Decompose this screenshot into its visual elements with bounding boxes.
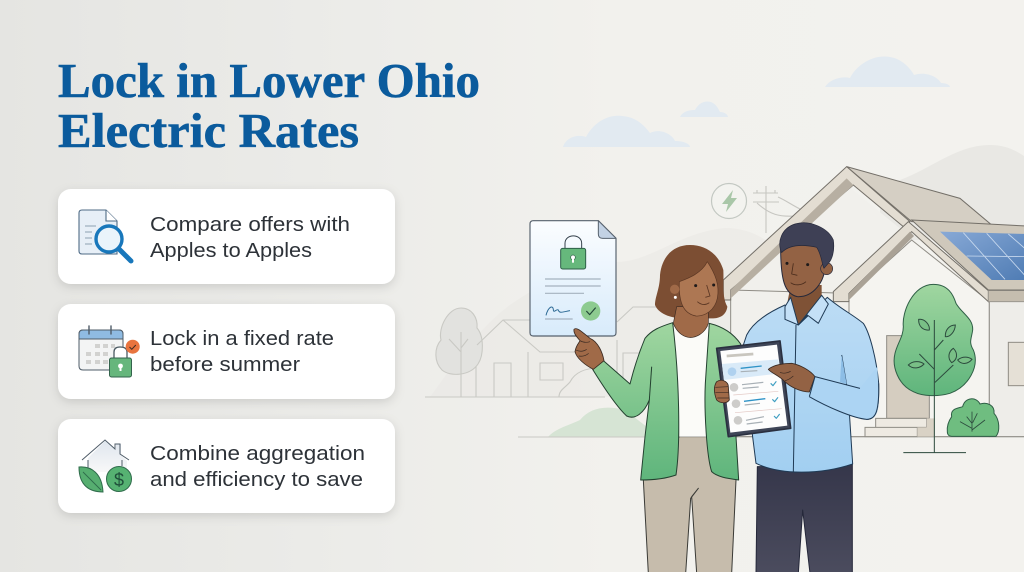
faded green bush [548,408,660,437]
fascia [988,291,1024,302]
white top [673,327,709,437]
left background tree [436,308,482,397]
text: aggregation and efficiency: and efficiency to save [150,468,363,491]
clouds [563,57,950,147]
text: compare offers: Compare offers with [150,213,350,236]
left gable roof [723,167,910,300]
illustration: two people with document [530,221,879,572]
icon: calendar with lock [79,326,140,377]
panel: aggregation and efficiency [58,419,395,513]
icon: electricity badge [712,184,746,218]
ground line [518,436,1024,438]
title: Lock in Lower Ohio [58,53,480,108]
text: compare offers [150,213,350,262]
walls [731,185,910,300]
person: woman [574,245,741,572]
text: fixed rate: Lock in a fixed rate [150,327,334,350]
shrub [947,399,999,436]
sleeve: man's forearm [809,367,879,419]
pants [756,463,852,572]
front gable roof [833,222,988,302]
background neighbourhood houses and tree [425,307,660,397]
text: fixed rate [150,327,334,376]
window [1008,342,1024,386]
check badge [581,301,600,321]
text: aggregation and efficiency [150,442,365,491]
text: fixed rate: before summer [150,353,300,376]
hand: woman holding tablet [714,380,729,403]
green tree [894,284,975,453]
text: aggregation and efficiency: Combine aggregation [150,442,365,465]
collar [785,295,828,325]
background hills [430,145,1024,397]
cardigan [593,323,679,480]
icon: document with magnifier [79,210,131,261]
solar panel [940,232,1024,280]
panel: fixed rate [58,304,395,399]
neck [787,285,822,325]
icon: house with leaf and dollar coin [79,440,132,492]
title: Electric Rates [58,103,359,158]
icon: house with leaf and dollar coin: $ [114,470,124,490]
signature [546,307,570,315]
text: compare offers: Apples to Apples [150,239,312,262]
rear roof [847,167,992,225]
pants [643,437,736,572]
utility pole [753,186,800,233]
face details [785,262,788,265]
person: man [742,223,879,572]
title [58,53,480,158]
head [781,240,825,297]
panel: compare offers [58,189,395,284]
hair [780,223,834,268]
house [723,167,1024,453]
shirt [742,297,879,472]
steps [865,418,927,437]
door [887,336,929,418]
hair [655,245,727,318]
document with lock [530,221,616,336]
pointing hand [574,329,604,369]
tablet [717,341,791,437]
lock [561,236,586,269]
hand: man pointing at tablet [768,363,815,392]
neck [673,307,708,337]
right roof slope [912,220,1024,290]
face [679,262,718,316]
